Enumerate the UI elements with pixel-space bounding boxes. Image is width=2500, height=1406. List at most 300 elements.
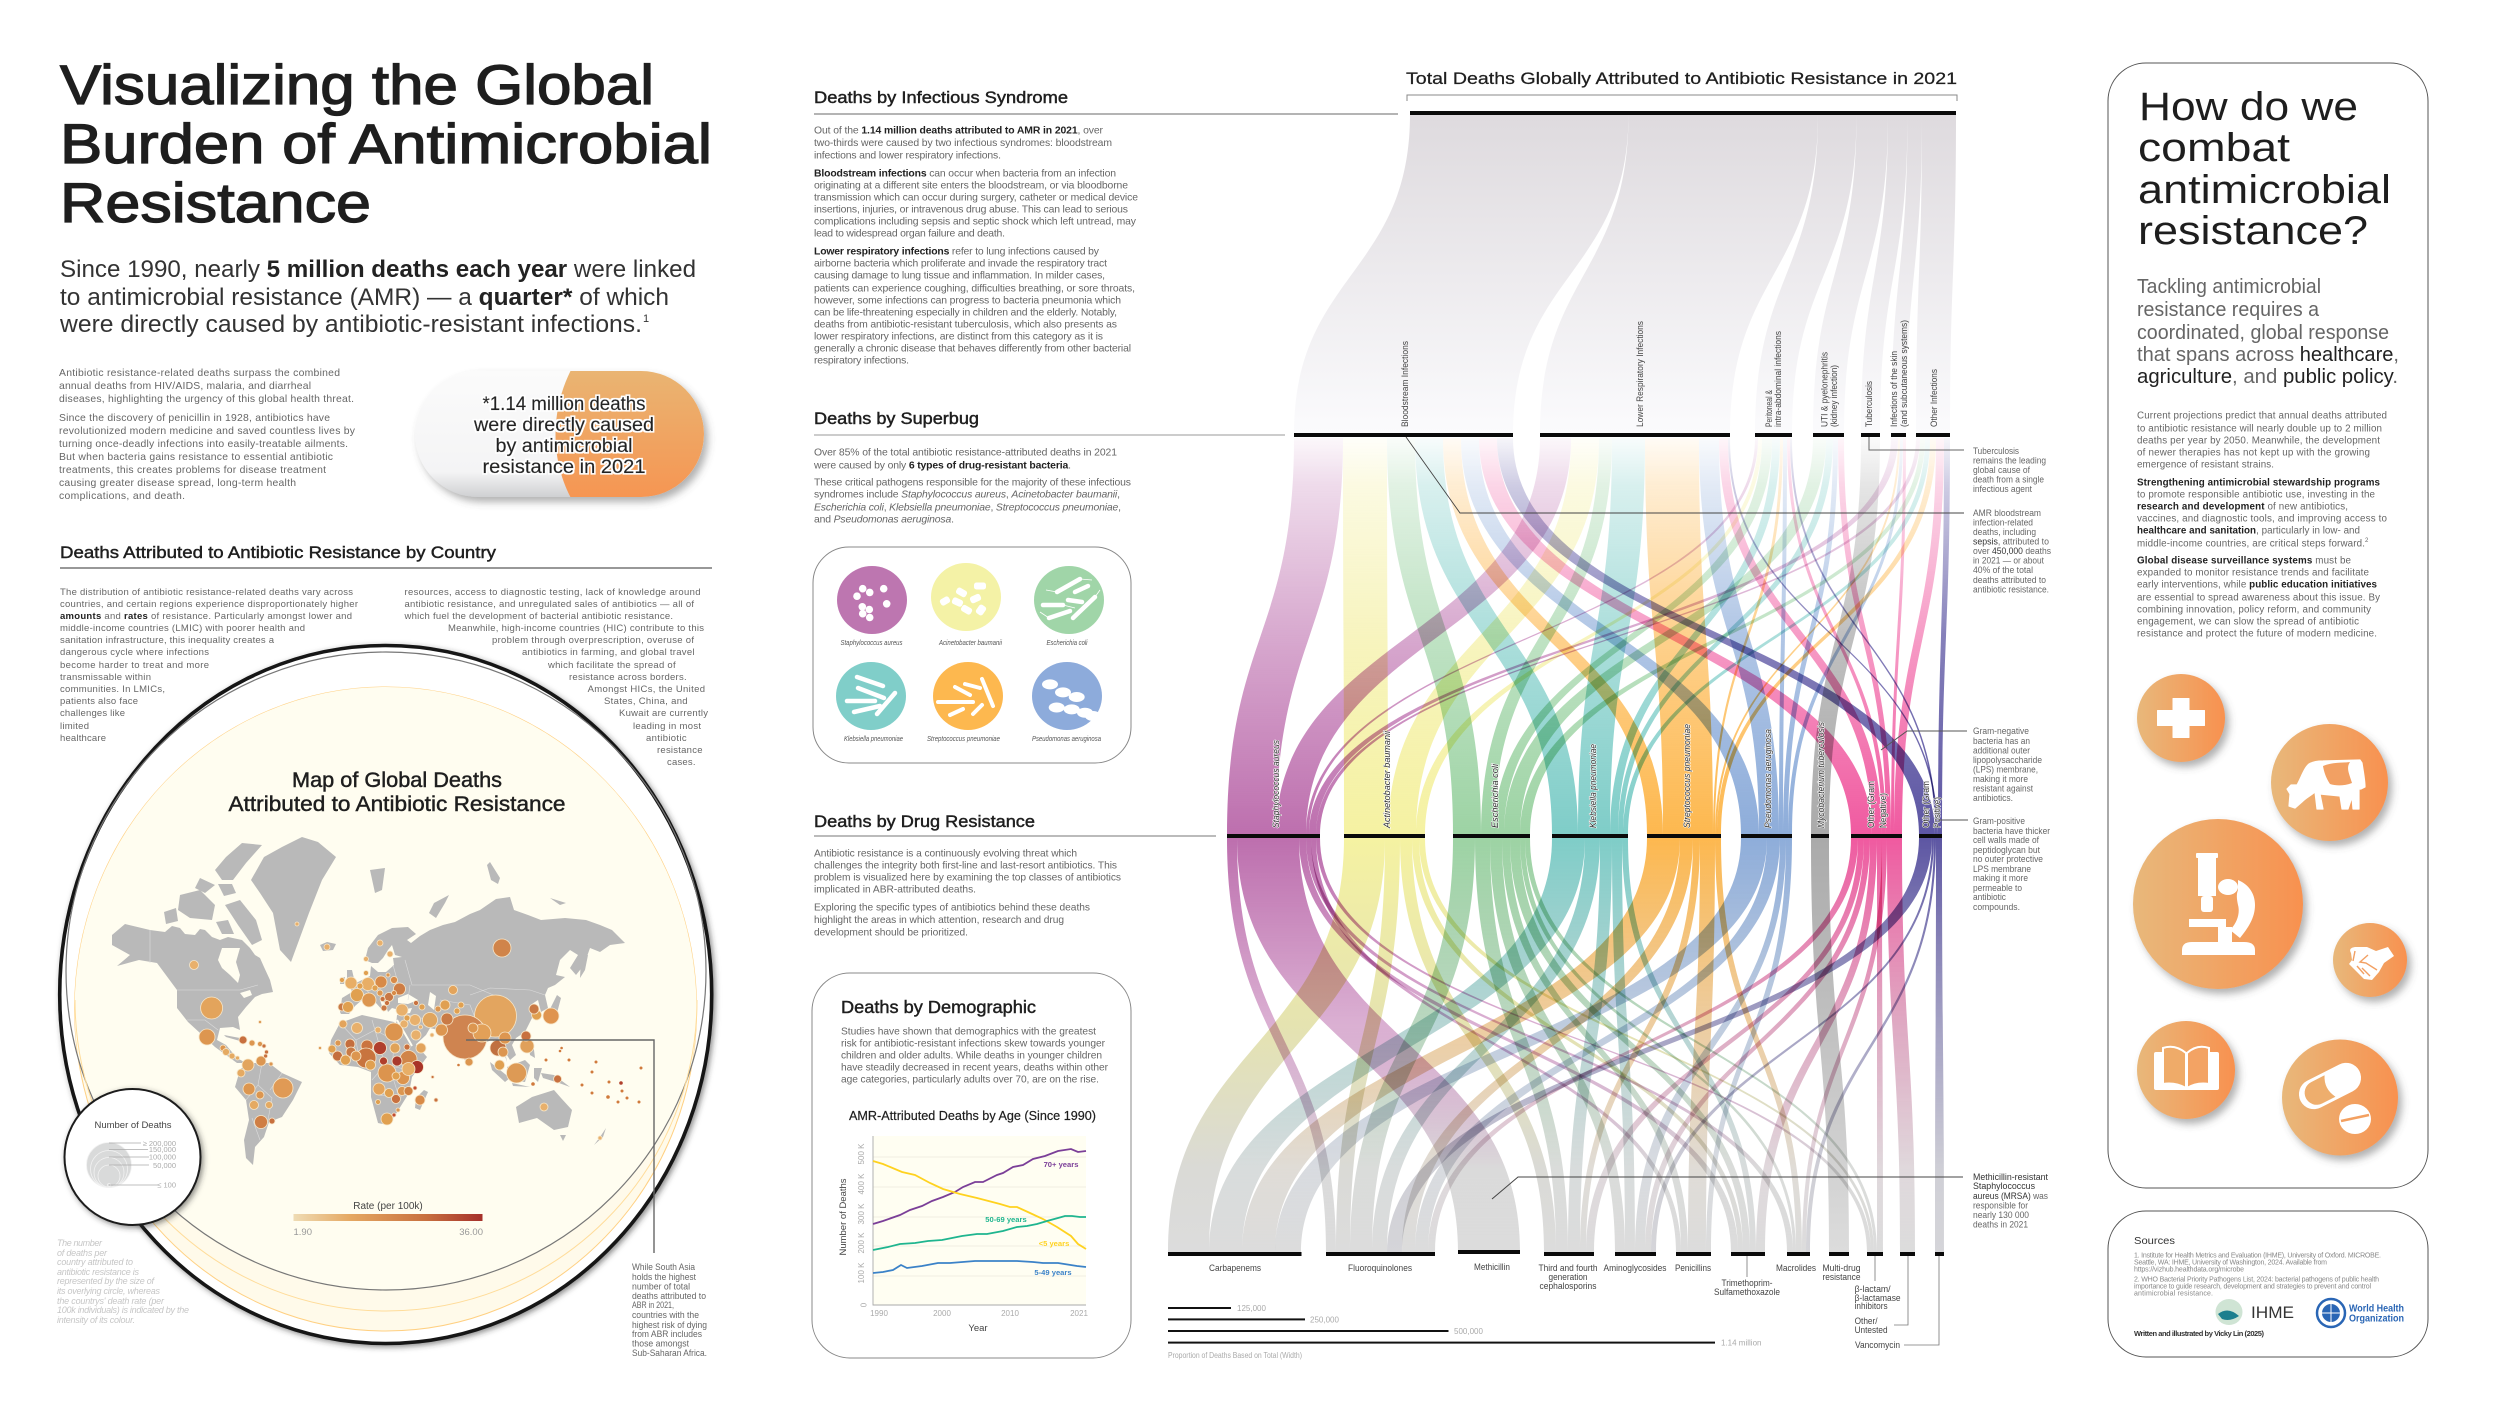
line chart: deaths by age: 50-69 years	[985, 1215, 1027, 1224]
scale legend: Proportion of Deaths Based on Total (Width)	[1168, 1351, 1302, 1360]
bacteria labels: Mycobacterium tuberculosis	[1816, 722, 1826, 828]
antibiotic labels: Other/	[1855, 1316, 1878, 1326]
flows: Mycobacterium	[1811, 438, 1880, 835]
annotation: South Asia: Sub-Saharan Africa.	[632, 1348, 707, 1359]
annotation: gram positive: peptidoglycan but	[1973, 845, 2040, 856]
text: infectious syndrome: Out of the 1.14 million deaths attributed to AMR in 2021, over	[814, 126, 1104, 136]
annotation: South Asia	[632, 1262, 707, 1359]
text: by-country right column: States, China, and	[604, 696, 688, 707]
flows: Staphylococcus to drugs	[1227, 838, 1871, 1252]
title	[60, 53, 712, 234]
annotation: bloodstream sepsis: over 450,000 deaths	[1973, 546, 2051, 557]
callout pill: were directly caused	[473, 415, 654, 436]
text: demographic: Studies have shown that demographics with the greatest	[841, 1026, 1096, 1038]
line chart: deaths by age: 2000	[933, 1309, 951, 1318]
callout pill: by antimicrobial	[496, 436, 632, 457]
text: combat lead	[2137, 276, 2399, 388]
text: combat body: engagement, we can slow the spread of antibiotic	[2137, 616, 2359, 628]
icon: research microscope	[2133, 819, 2303, 989]
title: Burden of Antimicrobial	[60, 112, 712, 175]
line chart: deaths by age: 200 K	[857, 1232, 866, 1253]
callout pill: resistance in 2021	[482, 457, 646, 478]
line chart: deaths by age: 0	[860, 1302, 868, 1307]
heading: drug resistance: Deaths by Drug Resistance	[814, 813, 1035, 831]
text: by-country left column: middle-income countries (LMIC) with poorer health and	[60, 623, 305, 634]
annotation: South Asia: holds the highest	[632, 1272, 696, 1283]
syndrome labels: Tuberculosis	[1864, 381, 1874, 427]
antibiotic labels: Macrolides	[1776, 1263, 1816, 1273]
map title: Attributed to Antibiotic Resistance	[228, 793, 566, 816]
text: combat body: of newer therapies has not kept up with the growing	[2137, 448, 2370, 458]
annotation: South Asia: number of total	[632, 1282, 690, 1292]
text: combat body: Current projections predict that annual deaths attributed	[2137, 410, 2387, 422]
annotation: gram negative: bacteria has an	[1973, 736, 2030, 747]
text: demographic: children and older adults. While deaths in younger children	[841, 1050, 1102, 1062]
text: by-country right column: resources, access to diagnostic testing, lack of knowledge around	[404, 587, 700, 598]
text: superbug: These critical pathogens responsible for the majority of these infectious	[814, 478, 1131, 488]
rate legend	[294, 1201, 483, 1238]
annotation: gram negative: Gram-negative	[1973, 726, 2029, 737]
syndrome labels: UTI & pyelonephritis	[1820, 352, 1830, 427]
logo: WHO: World Health	[2349, 1304, 2404, 1314]
flows: E. coli	[1387, 438, 1925, 835]
antibiotic labels: Penicillins	[1675, 1263, 1711, 1273]
text: drug resistance: Exploring the specific types of antibiotics behind these deaths	[814, 902, 1090, 914]
text: combat body: early interventions, while public education initiatives	[2137, 580, 2378, 590]
syndrome labels: Peritoneal &	[1764, 390, 1774, 427]
world map land	[112, 837, 625, 1165]
map title: Map of Global Deaths	[292, 769, 502, 792]
text: drug resistance: implicated in ABR-attributed deaths.	[814, 884, 976, 896]
title: Resistance	[60, 171, 371, 234]
subtitle: Since 1990, nearly 5 million deaths each year were linked	[60, 256, 696, 283]
text: demographic: age categories, particularly adults over 70, are on the rise.	[841, 1074, 1099, 1086]
rate legend: Rate (per 100k)	[353, 1201, 423, 1212]
country borders	[150, 930, 545, 1140]
text: combat body: healthcare and sanitation, particularly in low- and	[2137, 526, 2360, 536]
text: drug resistance	[814, 848, 1121, 938]
heading: combat: combat	[2138, 126, 2290, 170]
text: combat body: vaccines, and diagnostic tools, and improving access to	[2137, 514, 2388, 524]
text: combat lead: resistance requires a	[2137, 299, 2320, 321]
heading: combat: antimicrobial	[2138, 168, 2391, 212]
annotation: South Asia: While South Asia	[632, 1262, 696, 1273]
text: infectious syndrome	[814, 126, 1138, 366]
text: superbug: syndromes include Staphylococcus aureus, Acinetobacter baumanii,	[814, 490, 1120, 500]
text: combat body: deaths per year by 2050. Meanwhile, the development	[2137, 436, 2380, 446]
syndrome labels: intra-abdominal infections	[1773, 331, 1783, 427]
text: infectious syndrome: transmission which can occur during surgery, catheter or medical device	[814, 192, 1138, 204]
text: by-country left column	[60, 587, 358, 744]
callout pill	[415, 368, 710, 500]
heading: infectious syndrome: Deaths by Infectious Syndrome	[814, 89, 1068, 107]
text: infectious syndrome: Bloodstream infections can occur when bacteria from an infection	[814, 168, 1116, 180]
line chart: deaths by age: 400 K	[857, 1173, 866, 1194]
flows: Pseudomonas	[1461, 438, 1903, 835]
icon: Pseudomonas aeruginosa	[1032, 662, 1102, 743]
annotation: gram negative: additional outer	[1973, 746, 2031, 756]
heading: combat: How do we	[2139, 85, 2358, 129]
bacteria labels: Escherichia coli	[1490, 763, 1500, 828]
annotation: gram positive	[1939, 816, 2051, 913]
text: combat lead: Tackling antimicrobial	[2137, 276, 2321, 298]
antibiotic labels: Methicillin	[1474, 1262, 1510, 1272]
antibiotic labels: Sulfamethoxazole	[1714, 1287, 1780, 1297]
legend: number of deaths: Number of Deaths	[94, 1120, 172, 1131]
panel: world map circle	[60, 646, 712, 1344]
source list: 1. Institute for Health Metrics and Evaluation (IHME), University of Oxford. MICROBE.	[2134, 1252, 2381, 1260]
legend: number of deaths: ≤ 100	[157, 1180, 176, 1190]
text: by-country right column: leading in most	[633, 721, 701, 732]
line chart: deaths by age: 2010	[1001, 1309, 1019, 1318]
flows: Klebsiella to drugs	[1209, 838, 1756, 1252]
sankey title	[1406, 69, 1957, 101]
intro text	[59, 368, 356, 502]
bacteria labels: Other (Gram	[1921, 781, 1931, 828]
annotation: gram positive: making it more	[1973, 873, 2028, 884]
icon: policy handshake	[2333, 923, 2407, 997]
annotation: bloodstream sepsis: deaths, including	[1973, 527, 2036, 538]
map small island dots	[457, 1047, 642, 1104]
antibiotic labels: Multi-drug	[1822, 1263, 1860, 1273]
text: combat body: are essential to spread awareness about this issue. By	[2137, 592, 2380, 604]
panel: demographics	[812, 973, 1131, 1358]
annotation: gram positive: no outer protective	[1973, 854, 2043, 865]
text: superbug	[813, 448, 1131, 526]
text: by-country left column: transmissable within	[60, 672, 151, 683]
note: how to read map: intensity of its colour.	[57, 1315, 135, 1325]
annotation: bloodstream sepsis: 40% of the total	[1973, 565, 2033, 576]
scale legend: 500,000	[1454, 1327, 1483, 1336]
line chart: deaths by age: <5 years	[1039, 1239, 1069, 1248]
bacteria labels: Streptococcus pneumoniae	[1682, 724, 1692, 828]
icon: Streptococcus pneumoniae: Streptococcus pneumoniae	[927, 734, 1000, 743]
flows: gram positive to drugs	[1387, 838, 1944, 1252]
text: combat lead: coordinated, global response	[2137, 322, 2389, 344]
syndrome labels: (kidney infection)	[1829, 365, 1839, 427]
legend: number of deaths: 100,000	[149, 1152, 176, 1162]
sankey node bars	[1168, 111, 1956, 1256]
flows: Klebsiella	[1415, 438, 1930, 835]
text: infectious syndrome: patients can experience coughing, difficulties breathing, or sore throats,	[814, 284, 1135, 294]
line chart: deaths by age: 500 K	[857, 1143, 866, 1164]
legend: number of deaths: 150,000	[149, 1145, 176, 1154]
subtitle: to antimicrobial resistance (AMR) — a quarter* of which	[60, 284, 669, 311]
antibiotic labels: generation	[1548, 1272, 1588, 1282]
text: demographic: risk for antibiotic-resistant infections skew towards younger	[841, 1038, 1106, 1050]
text: combat body: Strengthening antimicrobial stewardship programs	[2137, 478, 2381, 488]
annotation: tuberculosis: Tuberculosis	[1973, 446, 2019, 457]
heading: superbug: Deaths by Superbug	[814, 410, 979, 428]
annotation: gram positive: bacteria have thicker	[1973, 826, 2051, 837]
subtitle: 1	[643, 313, 649, 325]
text: combat body: emergence of resistant strains.	[2137, 460, 2274, 470]
text: by-country right column: resistance across borders.	[569, 672, 687, 683]
line chart: deaths by age: 5-49 years	[1034, 1268, 1072, 1277]
scale legend: 125,000	[1237, 1304, 1266, 1313]
antibiotic labels: inhibitors	[1855, 1301, 1888, 1311]
logo: IHME: IHME	[2251, 1303, 2294, 1322]
text: by-country right column: antibiotic resistance, and unregulated sales of antibiotics — all of	[404, 599, 694, 610]
antibiotic labels: resistance	[1822, 1272, 1860, 1282]
note: how to read map	[57, 1238, 189, 1325]
text: demographic: have steadily decreased in recent years, deaths within other	[841, 1062, 1109, 1074]
annotation: MRSA: Staphylococcus	[1973, 1181, 2035, 1192]
heading: combat: resistance?	[2138, 209, 2368, 253]
text: drug resistance: development should be prioritized.	[814, 928, 968, 938]
source list: antimicrobial resistance.	[2134, 1290, 2213, 1298]
flows: Acinetobacter	[1343, 438, 1762, 835]
flows: Acinetobacter to drugs	[1168, 838, 1874, 1252]
annotation: gram negative: (LPS) membrane,	[1973, 764, 2038, 776]
rate legend: 1.90	[294, 1227, 312, 1238]
logo: IHME	[2216, 1299, 2294, 1325]
intro text: diseases, highlighting the urgency of this global health threat.	[59, 394, 354, 405]
text: drug resistance: problem is visualized here by examining the top classes of antibiotics	[814, 872, 1121, 884]
text: by-country right column: which fuel the development of bacterial antibiotic resistance.	[404, 611, 673, 622]
text: by-country right column: antibiotic	[646, 733, 687, 744]
icon: Streptococcus pneumoniae	[927, 662, 1003, 743]
text: superbug: Over 85% of the total antibiotic resistance-attributed deaths in 2021	[814, 448, 1117, 458]
text: combat body: expanded to monitor resistance trends and facilitate	[2137, 568, 2370, 578]
source list: https://vizhub.healthdata.org/microbe	[2134, 1266, 2244, 1274]
annotation: South Asia: from ABR includes	[632, 1329, 702, 1340]
note: how to read map: The number	[57, 1238, 103, 1248]
line chart: deaths by age: 2021	[1070, 1309, 1088, 1318]
line chart: deaths by age: Year	[968, 1323, 988, 1334]
text: infectious syndrome: airborne bacteria which proliferate and invade the respiratory tract	[814, 258, 1107, 270]
annotation: gram positive: Gram-positive	[1973, 816, 2025, 827]
text: by-country left column: countries, and certain regions experience disproportionately higher	[60, 599, 358, 610]
annotation: gram negative: lipopolysaccharide	[1973, 755, 2042, 766]
annotation: gram positive: permeable to	[1973, 883, 2022, 894]
annotation: gram negative: resistant against	[1973, 784, 2033, 794]
annotation: bloodstream sepsis: deaths attributed to	[1973, 575, 2046, 586]
icon: education book	[2137, 1021, 2235, 1119]
text: superbug: and Pseudomonas aeruginosa.	[814, 514, 954, 526]
text: combat body	[2137, 410, 2388, 640]
text: drug resistance: challenges the integrity both first-line and last-resort antibiotics. This	[814, 860, 1117, 872]
line chart: deaths by age	[838, 1136, 1088, 1334]
text: infectious syndrome: deaths from antibiotic-resistant tuberculosis, which also presents as	[814, 320, 1117, 330]
text: demographic	[841, 1026, 1109, 1086]
antibiotic labels: Fluoroquinolones	[1348, 1263, 1412, 1273]
text: by-country left column: The distribution of antibiotic resistance-related deaths vary across	[60, 587, 353, 598]
flows: Streptococcus	[1443, 438, 1936, 835]
text: drug resistance: highlight the areas in which attention, research and drug	[814, 915, 1064, 926]
flows: Pseudomonas to drugs	[1275, 838, 1792, 1252]
title: Visualizing the Global	[60, 53, 654, 116]
intro text: But when bacteria gains resistance to essential antibiotic	[59, 452, 333, 463]
annotation: gram positive: cell walls made of	[1973, 835, 2039, 846]
flows: Staphylococcus	[1227, 438, 1920, 835]
annotation: gram negative	[1881, 726, 2042, 804]
icon: Klebsiella pneumoniae	[836, 662, 906, 743]
annotation: MRSA: nearly 130 000	[1973, 1210, 2029, 1221]
text: infectious syndrome: two-thirds were caused by two infectious syndromes: bloodstream	[814, 138, 1112, 149]
sankey: total to syndromes	[1294, 114, 1956, 434]
heading: combat	[2138, 85, 2391, 253]
antibiotic labels	[1209, 1256, 1939, 1350]
sankey title: Total Deaths Globally Attributed to Antibiotic Resistance in 2021	[1406, 69, 1957, 88]
map bubbles	[190, 922, 602, 1140]
legend: number of deaths: 50,000	[153, 1161, 176, 1170]
text: infectious syndrome: lower respiratory infections, are distinct from this category as it is	[814, 332, 1103, 342]
icon: Pseudomonas aeruginosa: Pseudomonas aeruginosa	[1032, 734, 1101, 743]
icon: Escherichia coli	[1034, 566, 1104, 647]
text: by-country right column: resistance	[657, 745, 702, 756]
bacteria labels: Staphylococcus aureus	[1271, 740, 1281, 828]
source list: importance to guide research, development and strategies to prevent and control	[2134, 1284, 2371, 1290]
scale legend: 1.14 million	[1721, 1338, 1761, 1348]
antibiotic labels: β-lactamase	[1855, 1293, 1901, 1303]
text: by-country right column: which facilitate the spread of	[547, 660, 676, 671]
note: how to read map: of deaths per	[57, 1248, 108, 1258]
bacteria labels: Actinetobacter baumanii	[1382, 730, 1392, 829]
panel: how do we combat AMR	[2108, 63, 2428, 1188]
antibiotic labels: Carbapenems	[1209, 1263, 1261, 1273]
line chart: deaths by age: Number of Deaths	[838, 1178, 849, 1256]
syndrome labels: Lower Respiratory Infections	[1635, 321, 1645, 427]
intro text: revolutionized modern medicine and saved countless lives by	[59, 426, 356, 437]
antibiotic labels: Trimethoprim-	[1722, 1278, 1773, 1288]
rate legend: 36.00	[459, 1227, 483, 1238]
text: combat body: to antibiotic resistance will nearly double up to 2 million	[2137, 424, 2382, 434]
antibiotic labels: cephalosporins	[1540, 1281, 1597, 1291]
icon: Staphylococcus aureus: Staphylococcus aureus	[840, 638, 903, 647]
panel: sources	[2108, 1211, 2428, 1357]
bacteria labels: Negative)	[1878, 793, 1888, 828]
text: by-country right column: antibiotics in farming, and global travel	[522, 647, 694, 658]
text: combat body: to promote responsible antibiotic use, investing in the	[2137, 490, 2376, 500]
text: combat body: resistance and protect the future of modern medicine.	[2137, 628, 2377, 640]
logo: WHO	[2317, 1299, 2404, 1327]
text: infectious syndrome: originating at a different site enters the bloodstream, or via bloodborne	[814, 180, 1128, 192]
callout line: South Asia	[466, 1040, 654, 1253]
heading: deaths by country: Deaths Attributed to Antibiotic Resistance by Country	[60, 543, 497, 562]
text: by-country right column	[404, 587, 708, 768]
annotation: bloodstream sepsis: infection-related	[1973, 518, 2033, 528]
text: infectious syndrome: can be life-threatening especially in children and the elderly. Notably,	[814, 308, 1117, 318]
annotation: bloodstream sepsis: antibiotic resistance.	[1973, 584, 2049, 596]
note: how to read map: its overlying circle, whereas	[57, 1286, 160, 1296]
text: by-country left column: communities. In LMICs,	[60, 684, 165, 695]
annotation: South Asia: highest risk of dying	[632, 1320, 707, 1331]
icon: Staphylococcus aureus	[837, 566, 907, 647]
syndrome labels: (and subcutaneous systems)	[1899, 320, 1909, 427]
text: combat body: middle-income countries, are critical steps forward.	[2137, 538, 2365, 550]
text: infectious syndrome: generally a chronic disease that behaves differently from other bacterial	[814, 344, 1131, 354]
bacteria labels	[1271, 722, 1942, 829]
intro text: Antibiotic resistance-related deaths surpass the combined	[59, 368, 340, 379]
bacteria labels: Other (Gram	[1866, 781, 1876, 828]
text: combat body: combining innovation, policy reform, and community	[2137, 604, 2371, 616]
antibiotic labels: Aminoglycosides	[1604, 1263, 1667, 1273]
text: by-country left column: become harder to treat and more	[60, 660, 209, 671]
sankey: syndromes to bacteria	[1227, 438, 1950, 835]
note: how to read map: 100k individuals) is indicated by the	[57, 1305, 189, 1315]
annotation: MRSA: aureus (MRSA) was	[1973, 1191, 2048, 1202]
map title	[228, 769, 566, 816]
callout pill: *1.14 million deaths	[482, 394, 646, 415]
flows: Mycobacterium to drugs	[1811, 838, 1849, 1252]
heading: demographic: Deaths by Demographic	[841, 997, 1036, 1017]
note: how to read map: represented by the size of	[57, 1276, 155, 1286]
source list	[2134, 1252, 2381, 1298]
syndrome labels	[1400, 320, 1939, 427]
annotation: tuberculosis	[1869, 437, 2046, 495]
flows: E. coli to drugs	[1350, 838, 1877, 1252]
annotation: tuberculosis: infectious agent	[1973, 484, 2032, 495]
subtitle	[59, 256, 696, 338]
text: combat lead: agriculture, and public policy.	[2137, 366, 2398, 388]
intro text: Since the discovery of penicillin in 1928, antibiotics have	[59, 413, 330, 424]
text: infectious syndrome: complications including sepsis and septic shock which left untread, may	[814, 216, 1137, 228]
text: infectious syndrome: infections and lower respiratory infections.	[814, 150, 1001, 162]
text: combat body: research and development of new antibiotics,	[2137, 502, 2348, 512]
text: infectious syndrome: insertions, injuries, or intravenous drug abuse. This can lead to serious	[814, 204, 1128, 216]
text: by-country left column: patients also face	[60, 696, 138, 707]
text: by-country right column: Meanwhile, high-income countries (HIC) contribute to this	[448, 623, 704, 634]
annotation: South Asia: ABR in 2021,	[632, 1300, 674, 1311]
text: combat body: 2	[2365, 538, 2369, 544]
note: how to read map: the countrys' death rate (per	[57, 1296, 165, 1306]
source list: 2. WHO Bacterial Priority Pathogens List, 2024: bacterial pathogens of public health	[2134, 1276, 2379, 1284]
bacteria labels: Klebsiella pneumoniae	[1588, 744, 1598, 828]
intro text: treatments, this creates problems for disease treatment	[59, 465, 326, 476]
subtitle: were directly caused by antibiotic-resistant infections.	[59, 311, 642, 338]
legend: number of deaths: ≥ 200,000	[143, 1139, 176, 1148]
flows: gram negative to drugs	[1428, 838, 1915, 1252]
line chart: deaths by age: 1990	[870, 1309, 888, 1318]
flows: Streptococcus to drugs	[1242, 838, 1802, 1252]
text: by-country right column: cases.	[667, 757, 696, 768]
text: infectious syndrome: however, some infections can progress to bacteria pneumonia which	[814, 296, 1121, 306]
logo: WHO: Organization	[2349, 1314, 2404, 1324]
bacteria labels: Pseudomonas aeruginosa	[1763, 729, 1773, 828]
annotation: gram negative: making it more	[1973, 774, 2028, 785]
note: how to read map: antibiotic resistance is	[57, 1267, 140, 1277]
text: by-country left column: sanitation infrastructure, this inequality creates a	[60, 635, 275, 646]
text: by-country left column: amounts and rates of resistance. Particularly amongst lower and	[60, 611, 352, 622]
text: superbug: were caused by only 6 types of drug-resistant bacteria.	[813, 460, 1071, 472]
intro text: causing greater disease spread, long-term health	[59, 478, 296, 489]
flows: other gram negative	[1479, 438, 1944, 835]
icon: Klebsiella pneumoniae: Klebsiella pneumoniae	[844, 734, 903, 743]
text: infectious syndrome: causing damage to lung tissue and inflammation. In milder cases,	[814, 270, 1105, 282]
icon: Acinetobacter baumanii	[931, 563, 1002, 647]
annotation: South Asia: countries with the	[632, 1310, 699, 1321]
annotation: gram positive: LPS membrane	[1973, 864, 2031, 875]
annotation: South Asia: those amongst	[632, 1339, 689, 1350]
icon: medicine pills	[2282, 1040, 2398, 1156]
flows: other gram positive	[1497, 438, 1950, 835]
annotation: MRSA: responsible for	[1973, 1200, 2029, 1212]
line chart: deaths by age: 300 K	[857, 1203, 866, 1224]
chart title: AMR-Attributed Deaths by Age (Since 1990)	[849, 1109, 1096, 1123]
text: by-country left column: limited	[60, 721, 89, 732]
scale legend	[1168, 1304, 1761, 1360]
icon: agriculture cow	[2271, 724, 2388, 841]
text: by-country right column: Kuwait are currently	[619, 708, 708, 719]
credit: Written and illustrated by Vicky Lin (2025)	[2134, 1329, 2264, 1338]
antibiotic labels: Third and fourth	[1538, 1263, 1598, 1273]
annotation: bloodstream sepsis: AMR bloodstream	[1973, 508, 2041, 519]
text: infectious syndrome: Lower respiratory infections refer to lung infections caused by	[814, 246, 1100, 258]
syndrome labels: Bloodstream Infections	[1400, 341, 1410, 427]
icon: Escherichia coli: Escherichia coli	[1046, 638, 1088, 647]
icon: healthcare cross	[2137, 674, 2225, 762]
